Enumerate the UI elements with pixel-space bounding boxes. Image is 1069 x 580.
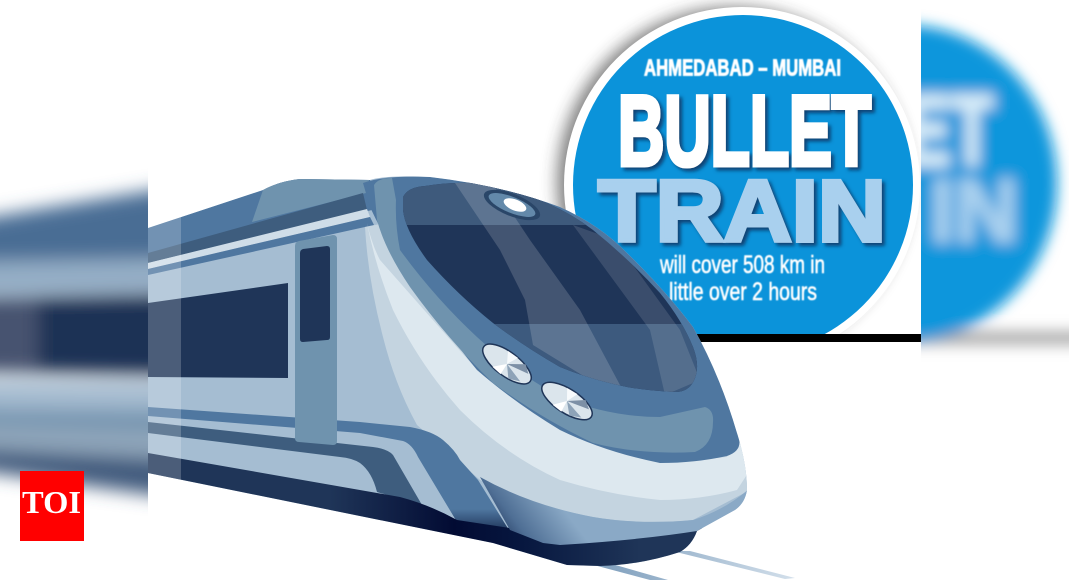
nose side panel <box>365 220 750 522</box>
roof highlight <box>252 176 370 222</box>
circle shadow <box>557 7 909 359</box>
roof stripe dark <box>148 193 367 263</box>
circle ring <box>564 7 920 363</box>
train illustration <box>148 170 758 575</box>
headlight 1 <box>482 343 532 385</box>
face mask lighter crescent <box>374 178 713 453</box>
headlight 2 <box>541 382 593 420</box>
face mask <box>363 177 739 463</box>
badge: Bullet Train circle <box>557 7 920 363</box>
badge caption line 2: little over 2 hours <box>669 278 817 306</box>
badge kicker: AHMEDABAD – MUMBAI <box>644 54 841 80</box>
lower blue stripe <box>148 407 512 535</box>
roof <box>148 179 372 253</box>
windshield <box>403 182 698 392</box>
black baseline rule <box>690 334 921 342</box>
circle fill <box>573 15 913 355</box>
rails <box>590 551 795 580</box>
left fade overlay <box>148 217 181 480</box>
panel: blurred train left <box>0 176 148 510</box>
train body <box>148 170 758 570</box>
roof stripe light <box>148 209 370 269</box>
logo: TOI <box>20 471 84 541</box>
panel: blurred badge right: ET <box>905 75 993 187</box>
underbody <box>148 453 702 566</box>
door <box>295 235 337 445</box>
panel: blurred badge right <box>921 14 1069 354</box>
lower dark stripe <box>148 422 422 505</box>
lower skirt <box>480 477 750 545</box>
roof lamp <box>484 190 540 220</box>
badge title: BULLET: BULLET <box>618 75 871 186</box>
badge caption line 1: will cover 508 km in <box>659 251 825 279</box>
roof stripe blue <box>148 217 374 275</box>
door window <box>300 246 330 342</box>
side window <box>148 283 288 378</box>
panel: blurred badge right: IN <box>930 161 1018 260</box>
logo: TOI: TOI <box>22 484 81 520</box>
nose light band <box>367 223 750 500</box>
badge title: TRAIN: TRAIN <box>598 163 886 260</box>
